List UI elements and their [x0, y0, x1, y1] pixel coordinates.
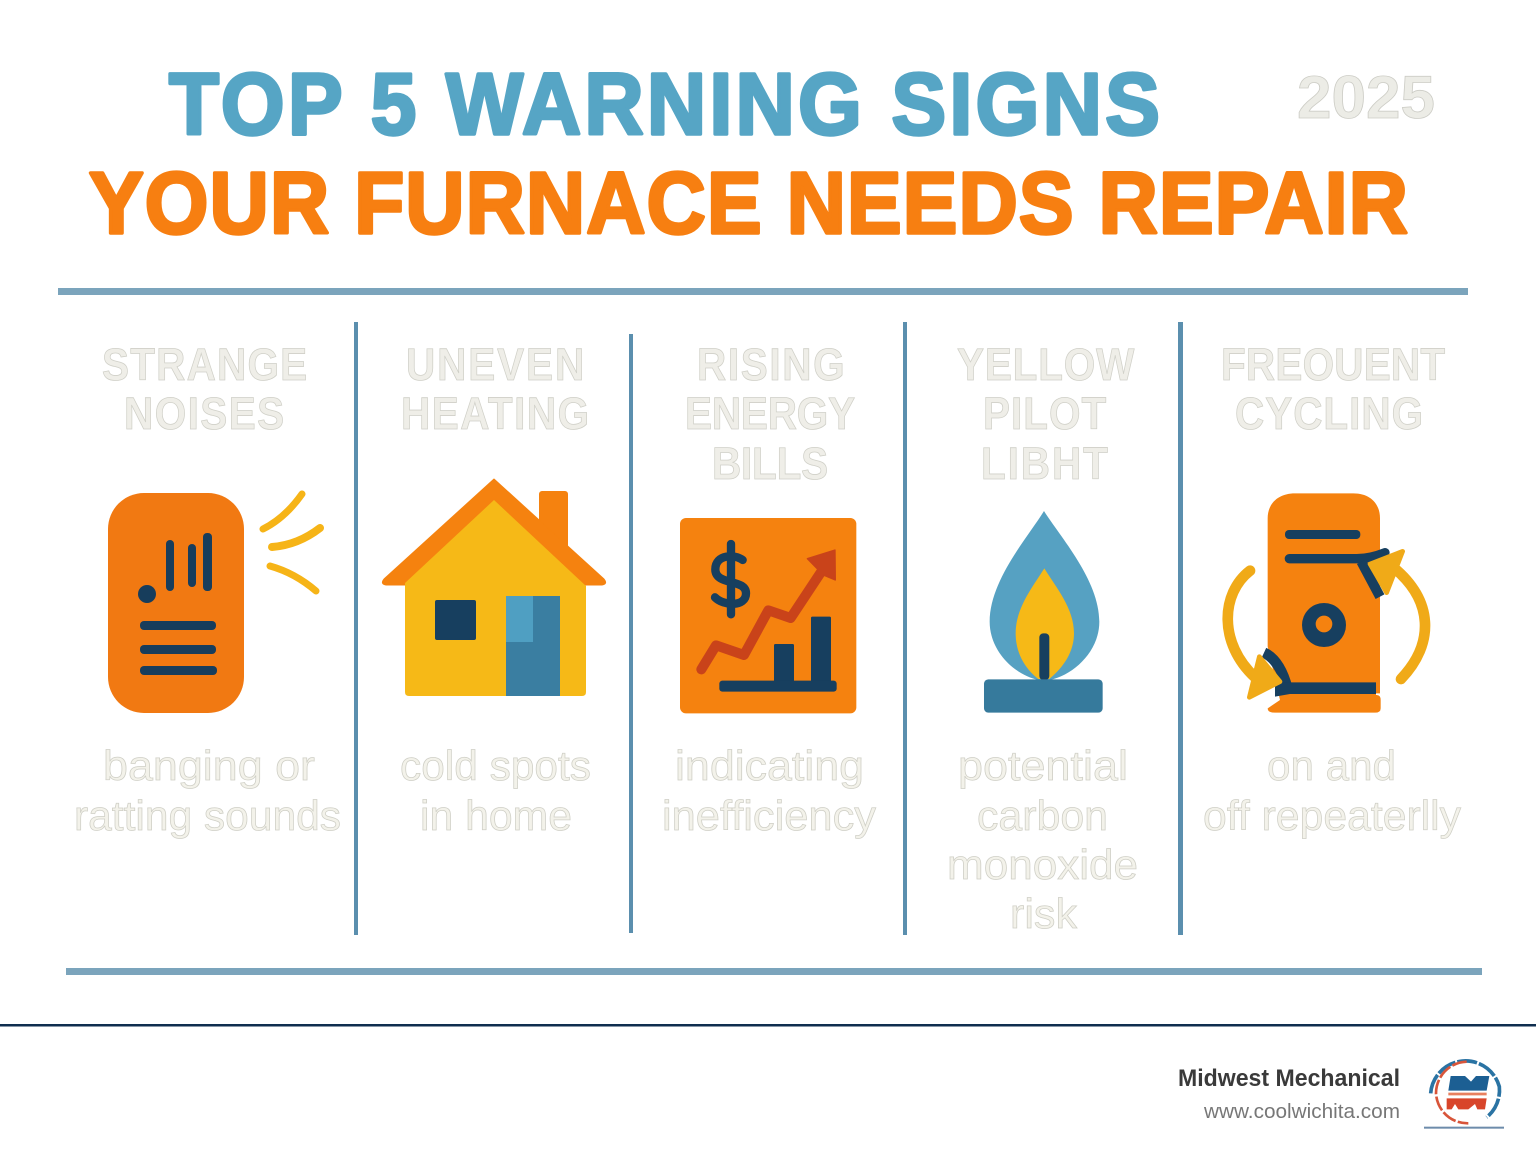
- description: rising energy bills: [662, 742, 876, 839]
- heading: rising energy bills: RISING: [697, 340, 845, 391]
- panel: strange noises: [74, 340, 341, 839]
- panel: rising energy bills: [662, 340, 876, 839]
- footer: company name and website: [1178, 1065, 1400, 1123]
- description: yellow pilot light: potential: [958, 742, 1128, 789]
- title: YOUR FURNACE NEEDS REPAIR: [89, 155, 1408, 252]
- heading: rising energy bills: ENERGY: [685, 389, 855, 440]
- panel: yellow pilot light: [947, 340, 1138, 937]
- description: yellow pilot light: carbon: [977, 792, 1108, 839]
- description: rising energy bills: inefficiency: [662, 792, 876, 839]
- description: uneven heating: cold spots: [400, 742, 591, 789]
- title: [89, 56, 1408, 252]
- icon: noisy furnace: [108, 493, 320, 713]
- heading: uneven heating: [401, 340, 589, 440]
- icon: house: [382, 479, 606, 696]
- description: yellow pilot light: risk: [1010, 890, 1078, 937]
- heading: rising energy bills: BILLS: [712, 439, 828, 490]
- icon: bill with rising chart: [680, 518, 856, 713]
- description: strange noises: [74, 742, 341, 839]
- heading: strange noises: STRANGE: [102, 340, 307, 391]
- heading: uneven heating: HEATING: [401, 389, 589, 440]
- heading: uneven heating: UNEVEN: [406, 340, 584, 391]
- description: rising energy bills: indicating: [675, 742, 864, 789]
- panel: frequent cycling: [1203, 340, 1461, 839]
- heading: yellow pilot light: YELLOW: [957, 340, 1135, 391]
- year label: 2025: [1297, 64, 1435, 131]
- footer: company name and website: www.coolwichita.com: [1203, 1101, 1400, 1123]
- footer: company name and website: Midwest Mechanical: [1178, 1065, 1400, 1092]
- heading: frequent cycling: [1221, 340, 1445, 440]
- heading: strange noises: NOISES: [124, 389, 284, 440]
- title: TOP 5 WARNING SIGNS: [169, 56, 1160, 153]
- description: frequent cycling: off repeaterlly: [1203, 792, 1461, 839]
- icon: cycling furnace: [1228, 493, 1425, 713]
- description: uneven heating: [400, 742, 591, 839]
- description: strange noises: ratting sounds: [74, 792, 341, 839]
- heading: yellow pilot light: LIBHT: [981, 439, 1108, 490]
- description: yellow pilot light: monoxide: [947, 841, 1138, 888]
- description: yellow pilot light: [947, 742, 1138, 937]
- heading: frequent cycling: FREOUENT: [1221, 340, 1445, 391]
- icon: company logo: [1424, 1061, 1504, 1129]
- heading: rising energy bills: [685, 340, 855, 490]
- description: strange noises: banging or: [103, 742, 315, 789]
- heading: strange noises: [102, 340, 307, 440]
- heading: yellow pilot light: [957, 340, 1135, 490]
- description: frequent cycling: on and: [1267, 742, 1396, 789]
- panel: uneven heating: [382, 340, 606, 839]
- heading: yellow pilot light: PILOT: [983, 389, 1106, 440]
- description: uneven heating: in home: [420, 792, 572, 839]
- icon: flame on burner: [984, 511, 1103, 713]
- description: frequent cycling: [1203, 742, 1461, 839]
- heading: frequent cycling: CYCLING: [1235, 389, 1423, 440]
